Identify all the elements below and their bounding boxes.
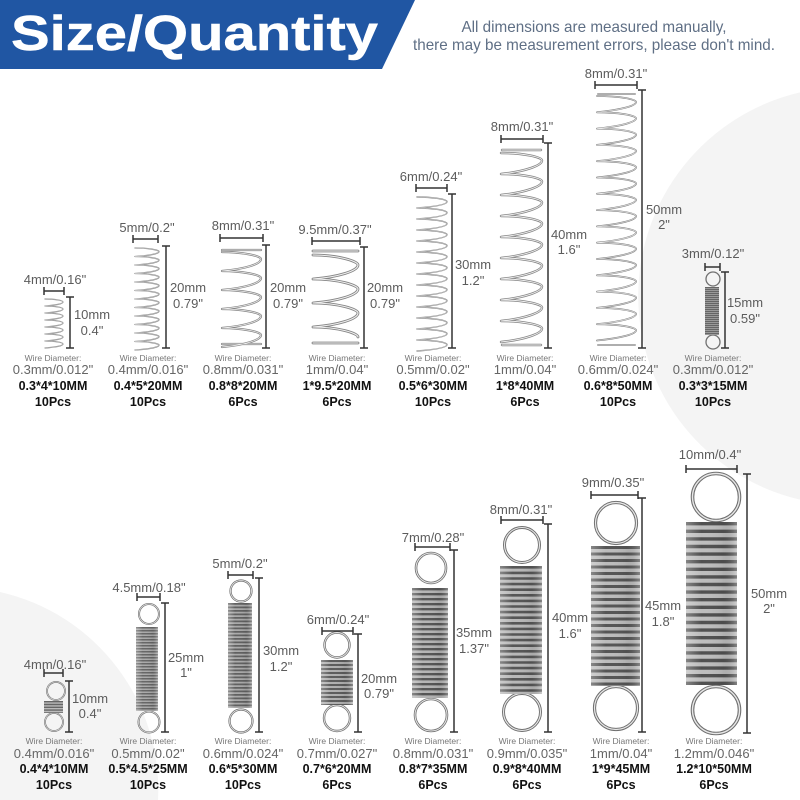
spec text: 0.3mm/0.012" [13,362,94,377]
height dimension [448,194,491,348]
height dimension [544,143,587,348]
compression spring column 3 [203,218,306,409]
spec text: 0.9mm/0.035" [487,746,568,761]
height dimension [65,681,108,732]
height dimension: 1.6" [558,242,581,257]
width dimension: 9mm/0.35" [582,475,645,490]
spec text: 0.7*6*20MM [303,762,371,776]
spec text: 0.5*4.5*25MM [108,762,188,776]
height dimension: 40mm [552,610,588,625]
spec text: 6Pcs [322,778,352,792]
spring 0.5*4.5*25MM [136,604,160,732]
spring 0.4*5*20MM [135,248,159,350]
width dimension [491,119,554,143]
extension spring bottom column 5 [393,530,492,792]
compression spring column 5 [396,169,491,409]
height dimension [450,550,492,732]
spring 0.3*4*10MM [45,299,63,348]
title banner [0,0,415,69]
height dimension: 20mm [170,280,206,295]
spec text [108,353,189,409]
spec text: 0.8*8*20MM [209,379,277,393]
height dimension: 0.4" [81,323,104,338]
measurement note: there may be measurement errors, please don't mind. [413,37,775,54]
width dimension: 4mm/0.16" [24,272,87,287]
spring 0.8*8*20MM [222,250,261,347]
spring 0.3*3*15MM [705,272,720,349]
width dimension: 6mm/0.24" [400,169,463,184]
spec text: Wire Diameter: [686,736,742,746]
spec text: 0.3*3*15MM [679,379,747,393]
spec text: 10Pcs [130,395,166,409]
compression spring column 4 [298,222,403,409]
spec text: 10Pcs [695,395,731,409]
height dimension [544,524,588,732]
spec text: 1.2mm/0.046" [674,746,755,761]
spring 0.5*6*30MM [417,197,447,351]
spec text: 0.6mm/0.024" [203,746,284,761]
spec text: 10Pcs [415,395,451,409]
height dimension [743,474,787,733]
extension spring bottom column 4 [297,612,397,792]
spec text: Wire Diameter: [497,353,553,363]
spec text: 6Pcs [510,395,540,409]
height dimension: 10mm [74,307,110,322]
height dimension: 0.79" [370,296,400,311]
spec text [578,353,659,409]
height dimension: 20mm [367,280,403,295]
spec text [396,353,470,409]
spring 0.4*4*10MM [44,682,65,731]
width dimension: 8mm/0.31" [491,119,554,134]
height dimension [255,578,299,732]
height dimension: 1.2" [462,273,485,288]
spec text: 0.4*5*20MM [114,379,182,393]
spec text: 1.2*10*50MM [676,762,752,776]
spec text: 0.8mm/0.031" [393,746,474,761]
width dimension: 3mm/0.12" [682,246,745,261]
width dimension [212,556,268,579]
height dimension: 0.59" [730,311,760,326]
height dimension: 45mm [645,598,681,613]
spec text: 1mm/0.04" [494,362,557,377]
extension spring bottom column 7 [582,475,681,792]
spec text: Wire Diameter: [590,353,646,363]
height dimension: 1.8" [652,614,675,629]
spec text: Wire Diameter: [309,736,365,746]
height dimension: 1" [180,665,192,680]
spec text: 0.3*4*10MM [19,379,87,393]
spec text: Wire Diameter: [120,353,176,363]
height dimension: 2" [763,601,775,616]
width dimension [585,66,648,89]
spec text: 0.4mm/0.016" [108,362,189,377]
width dimension: 8mm/0.31" [490,502,553,517]
spec text: Wire Diameter: [685,353,741,363]
extension spring column 8 [673,246,763,409]
height dimension: 50mm [646,202,682,217]
spring 1*9*45MM [591,502,640,730]
height dimension: 0.79" [364,686,394,701]
spring 0.9*8*40MM [500,528,542,730]
width dimension: 4mm/0.16" [24,657,87,672]
width dimension [298,222,372,245]
spec text: 10Pcs [36,778,72,792]
height dimension [638,498,681,732]
height dimension [162,246,206,348]
spec text: 1*8*40MM [496,379,554,393]
spec text: 0.5*6*30MM [399,379,467,393]
height dimension: 1.37" [459,641,489,656]
spec text: 0.4mm/0.016" [14,746,95,761]
spec text: 0.8mm/0.031" [203,362,284,377]
height dimension: 40mm [551,227,587,242]
width dimension [679,447,742,473]
height dimension: 30mm [455,257,491,272]
spec text [673,353,754,409]
spring 0.7*6*20MM [321,632,353,731]
spring 1*8*40MM [501,150,542,345]
spec text: 6Pcs [418,778,448,792]
spec text: 10Pcs [600,395,636,409]
width dimension: 8mm/0.31" [585,66,648,81]
spec text [674,736,755,792]
height dimension [354,634,397,732]
width dimension: 8mm/0.31" [212,218,275,233]
width dimension [212,218,275,242]
spec text: Wire Diameter: [405,736,461,746]
spec text: 6Pcs [699,778,729,792]
height dimension: 2" [658,217,670,232]
height dimension: 50mm [751,586,787,601]
spec text: Wire Diameter: [25,353,81,363]
spring 0.6*5*30MM [228,580,252,732]
spec text: Wire Diameter: [120,736,176,746]
width dimension: 10mm/0.4" [679,447,742,462]
spec text [13,353,94,409]
spec text: 0.5mm/0.02" [396,362,470,377]
width dimension [400,169,463,192]
compression spring column 7 [578,66,682,409]
spec text: 0.6mm/0.024" [578,362,659,377]
spec text: Wire Diameter: [499,736,555,746]
spec text: Wire Diameter: [405,353,461,363]
width dimension [682,246,745,271]
height dimension: 1.6" [559,626,582,641]
spec text [494,353,557,409]
spec text: Wire Diameter: [593,736,649,746]
spec text [14,736,95,792]
spec text: 0.8*7*35MM [399,762,467,776]
width dimension [307,612,370,635]
extension spring bottom column 6 [487,502,588,792]
spring 0.6*8*50MM [597,94,636,345]
spec text: 0.6*8*50MM [584,379,652,393]
extension spring bottom column 8 [674,447,787,792]
spec text: 0.9*8*40MM [493,762,561,776]
compression spring column 2 [108,220,206,409]
spec text [108,736,188,792]
spec text: Wire Diameter: [215,353,271,363]
height dimension: 25mm [168,650,204,665]
extension spring bottom column 3 [203,556,299,792]
spec text: Wire Diameter: [26,736,82,746]
height dimension: 30mm [263,643,299,658]
spec text [590,736,653,792]
width dimension: 5mm/0.2" [119,220,175,235]
width dimension: 4.5mm/0.18" [112,580,186,595]
spec text: 6Pcs [512,778,542,792]
measurement note: All dimensions are measured manually, [462,19,726,36]
spec text: 1mm/0.04" [590,746,653,761]
spring 0.8*7*35MM [412,553,448,731]
spec text: 1*9*45MM [592,762,650,776]
spec text: 0.6*5*30MM [209,762,277,776]
spec text: 1*9.5*20MM [303,379,371,393]
spec text: 1mm/0.04" [306,362,369,377]
spec text: Wire Diameter: [309,353,365,363]
spec text: 0.4*4*10MM [20,762,88,776]
title banner: Size/Quantity [11,7,378,61]
height dimension [638,90,682,348]
height dimension [721,272,763,348]
width dimension [119,220,175,243]
compression spring column 6 [491,119,587,409]
height dimension: 1.2" [270,659,293,674]
spec text: 6Pcs [606,778,636,792]
measurement note [413,19,775,54]
spec text: 6Pcs [228,395,258,409]
height dimension: 0.79" [273,296,303,311]
width dimension: 7mm/0.28" [402,530,465,545]
spec text: 10Pcs [225,778,261,792]
width dimension: 6mm/0.24" [307,612,370,627]
spec text: 0.7mm/0.027" [297,746,378,761]
spec text: 0.5mm/0.02" [111,746,185,761]
spring 1.2*10*50MM [686,474,740,734]
spec text: 6Pcs [322,395,352,409]
height dimension: 20mm [361,671,397,686]
spec text [487,736,568,792]
spec text [203,353,284,409]
height dimension [161,603,204,732]
spec text [297,736,378,792]
extension spring bottom column 1 [14,657,108,792]
spec text [393,736,474,792]
width dimension: 5mm/0.2" [212,556,268,571]
compression spring column 1 [13,272,110,409]
width dimension [582,475,645,499]
height dimension: 20mm [270,280,306,295]
spring 1*9.5*20MM [313,251,358,343]
height dimension: 0.79" [173,296,203,311]
height dimension: 0.4" [79,706,102,721]
extension spring bottom column 2 [108,580,204,792]
height dimension [66,297,110,348]
spec text: 10Pcs [130,778,166,792]
spec text: Wire Diameter: [215,736,271,746]
width dimension [490,502,553,524]
spec text: 10Pcs [35,395,71,409]
height dimension: 15mm [727,295,763,310]
height dimension: 35mm [456,625,492,640]
height dimension [360,247,403,348]
spec text [303,353,371,409]
width dimension: 9.5mm/0.37" [298,222,372,237]
height dimension [262,245,306,348]
spec text: 0.3mm/0.012" [673,362,754,377]
height dimension: 10mm [72,691,108,706]
spec text [203,736,284,792]
